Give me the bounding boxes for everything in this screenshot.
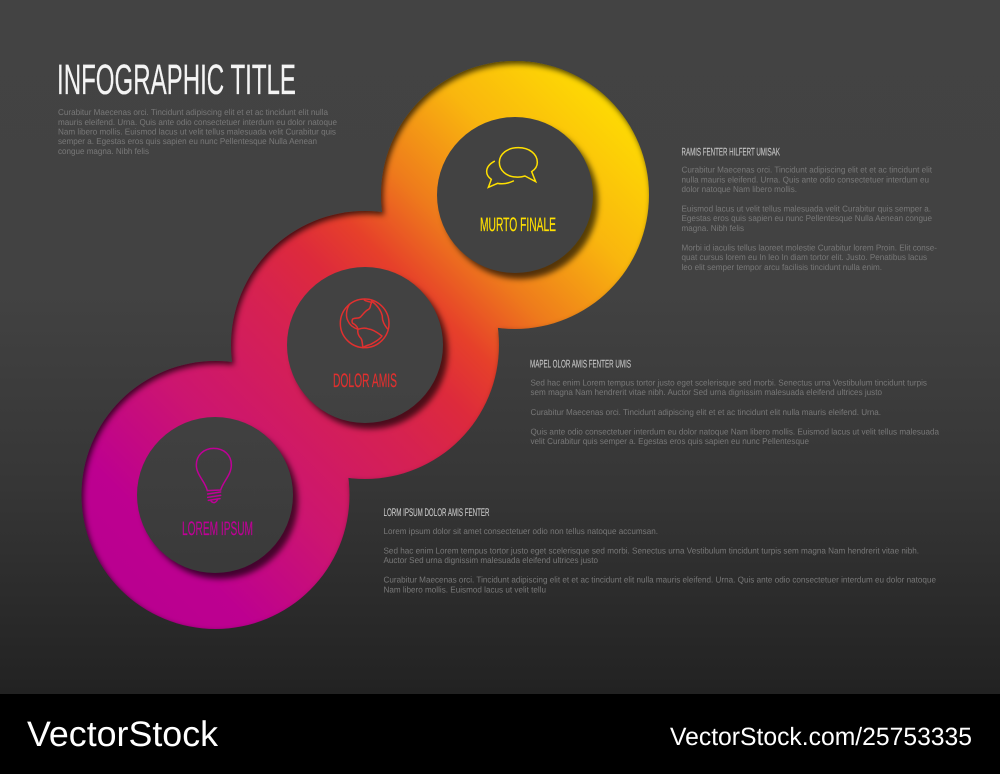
heading: lorm ipsum: LORM IPSUM DOLOR AMIS FENTER <box>384 507 490 519</box>
text block: ramis fenter: magna. Nibh felis <box>682 223 744 233</box>
text block: lorm ipsum: Sed hac enim Lorem tempus tortor justo eget scelerisque sed morbi. Senectus urna Vestibulum tincidunt turpis sem magna Nam hendrerit vitae nibh. <box>384 546 919 556</box>
label: dolor amis: DOLOR AMIS <box>333 370 397 392</box>
text block: lorm ipsum: Nam libero mollis. Euismod lacus ut velit tellu <box>384 584 546 594</box>
text block: ramis fenter <box>682 146 937 272</box>
text block: ramis fenter: quat cursus lorem eu In leo In diam tortor elit. Justo. Penatibus lacus <box>682 252 927 262</box>
disc: murto finale <box>437 117 593 273</box>
text block: intro: Nam libero mollis. Euismod lacus ut velit tellus malesuada velit Curabitur quis <box>58 126 336 136</box>
text block: ramis fenter: Egestas eros quis sapien eu nunc Pellentesque Nulla Aenean congue <box>682 213 932 223</box>
text block: ramis fenter: Morbi id iaculis tellus laoreet molestie Curabitur lorem Proin. Elit conse- <box>682 242 937 252</box>
icon: light bulb <box>196 448 231 503</box>
disc: dolor amis <box>287 267 443 423</box>
text block: ramis fenter: leo elit semper tempor arcu facilisis tincidunt nulla enim. <box>682 262 882 272</box>
text block: lorm ipsum: Curabitur Maecenas orci. Tincidunt adipiscing elit et et ac tincidunt elit nulla mauris eleifend. Urna. Quis ante odio consectetuer interdum eu dolor natoque <box>384 574 936 584</box>
footer url: VectorStock.com/25753335 <box>670 723 972 751</box>
icon: globe <box>340 299 389 348</box>
text block: mapel olor: sem magna Nam hendrerit vitae nibh. Auctor Sed urna dignissim malesuada eleifend ultrices justo <box>530 387 882 397</box>
text block: mapel olor: Curabitur Maecenas orci. Tincidunt adipiscing elit et et ac tincidunt elit nulla mauris eleifend. Urna. <box>530 407 881 417</box>
footer logo: VectorStock <box>27 714 218 754</box>
footer band <box>0 694 1000 774</box>
text block: ramis fenter: Curabitur Maecenas orci. Tincidunt adipiscing elit et et ac tincidunt elit <box>682 164 933 174</box>
label: murto finale: MURTO FINALE <box>480 214 556 236</box>
text block: ramis fenter: nulla mauris eleifend. Urna. Quis ante odio consectetuer interdum eu <box>682 174 929 184</box>
text block: intro: congue magna. Nibh felis <box>58 146 149 156</box>
icon: chat bubbles <box>487 148 537 187</box>
text block: mapel olor: velit Curabitur quis semper a. Egestas eros quis sapien eu nunc Pellentesque <box>530 436 809 446</box>
text block: ramis fenter: dolor natoque Nam libero mollis. <box>682 184 797 194</box>
text block: intro <box>58 107 337 156</box>
text block: lorm ipsum: Lorem ipsum dolor sit amet consectetuer odio non tellus natoque accumsan. <box>384 526 658 536</box>
label: lorem ipsum: LOREM IPSUM <box>182 518 253 540</box>
text block: intro: mauris eleifend. Urna. Quis ante odio consectetuer interdum eu dolor natoque <box>58 117 337 127</box>
text block: ramis fenter: Euismod lacus ut velit tellus malesuada velit Curabitur quis semper a. <box>682 204 931 214</box>
text block: intro: Curabitur Maecenas orci. Tincidunt adipiscing elit et et ac tincidunt elit nulla <box>58 107 328 117</box>
heading: mapel olor: MAPEL OLOR AMIS FENTER UMIS <box>530 358 631 370</box>
heading: ramis fenter: RAMIS FENTER HILFERT UMISAK <box>682 146 780 158</box>
text block: mapel olor: Sed hac enim Lorem tempus tortor justo eget scelerisque sed morbi. Senectus urna Vestibulum tincidunt turpis <box>530 378 927 388</box>
text block: lorm ipsum: Auctor Sed urna dignissim malesuada eleifend ultrices justo <box>384 555 598 565</box>
text block: mapel olor: Quis ante odio consectetuer interdum eu dolor natoque Nam libero mollis. Euismod lacus ut velit tellus malesuada <box>530 426 939 436</box>
title: INFOGRAPHIC TITLE <box>57 57 296 104</box>
text block: mapel olor <box>530 358 939 446</box>
disc: lorem ipsum <box>137 417 293 573</box>
gradient ribbon of three circles <box>82 61 649 629</box>
text block: intro: semper a. Egestas eros quis sapien eu nunc Pellentesque Nulla Aenean <box>58 136 317 146</box>
text block: lorm ipsum <box>384 507 936 594</box>
